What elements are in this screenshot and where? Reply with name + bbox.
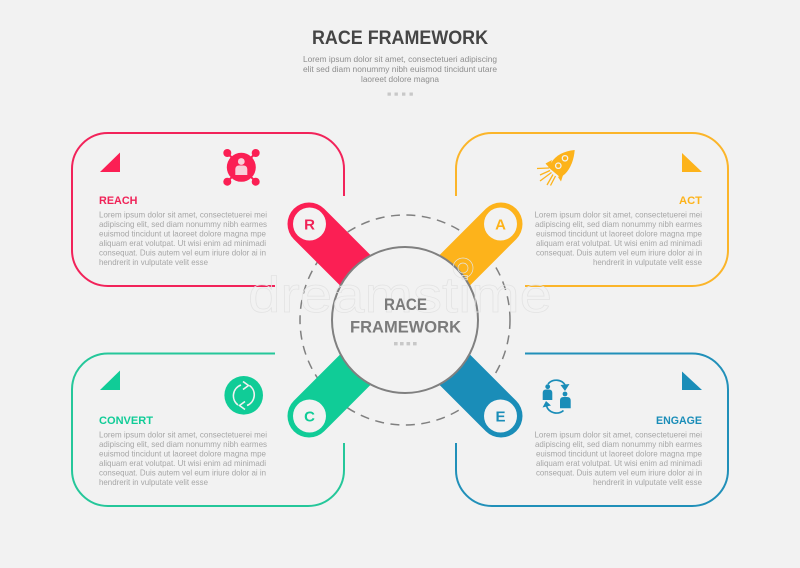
reach body text <box>99 210 267 267</box>
central diagram <box>248 208 552 432</box>
icon: convert cycle <box>224 376 263 415</box>
reach body text: euismod tincidunt ut laoreet dolore magna mpe <box>99 228 266 238</box>
pill: A <box>405 208 517 320</box>
pill: E <box>405 320 517 432</box>
panel: reach <box>72 133 344 286</box>
act body text: hendrerit in vulputate velit esse <box>593 257 702 267</box>
engage body text: aliquam erat volutpat. Ut wisi enim ad minimadi <box>536 458 702 468</box>
act body text: aliquam erat volutpat. Ut wisi enim ad minimadi <box>536 238 702 248</box>
act corner triangle <box>682 153 702 172</box>
center label: RACE <box>384 296 427 314</box>
act body text: consequat. Duis autem vel eum iriure dolor ai in <box>536 248 702 258</box>
panel: act <box>456 133 728 286</box>
center label: FRAMEWORK <box>350 318 461 336</box>
header dots <box>388 92 413 96</box>
center dots <box>394 342 417 345</box>
pill: A: A <box>495 216 506 234</box>
reach body text: consequat. Duis autem vel eum iriure dolor ai in <box>99 248 266 258</box>
convert body text <box>99 430 267 487</box>
convert outline <box>72 354 344 506</box>
reach outline <box>72 133 344 286</box>
convert body text: adipiscing elit, sed diam nonummy nibh earmes <box>99 439 267 449</box>
engage heading: ENGAGE <box>656 415 702 427</box>
subtitle text: Lorem ipsum dolor sit amet, consectetueri adipiscing <box>303 54 497 64</box>
engage body text: Lorem ipsum dolor sit amet, consectetuerei mei <box>534 430 702 440</box>
subtitle text <box>303 54 497 84</box>
panel: engage <box>456 354 728 506</box>
engage body text: euismod tincidunt ut laoreet dolore magna mpe <box>536 448 702 458</box>
reach body text: adipiscing elit, sed diam nonummy nibh earmes <box>99 219 267 229</box>
engage body text: hendrerit in vulputate velit esse <box>593 477 702 487</box>
convert heading: CONVERT <box>99 415 153 427</box>
icon: rocket <box>537 150 575 186</box>
panel: convert <box>72 354 344 506</box>
center label <box>350 296 461 336</box>
reach heading: REACH <box>99 195 138 207</box>
convert body text: Lorem ipsum dolor sit amet, consectetuerei mei <box>99 430 267 440</box>
reach corner triangle <box>100 152 120 172</box>
pill: E: E <box>495 408 506 426</box>
convert body text: hendrerit in vulputate velit esse <box>99 477 208 487</box>
engage body text <box>534 430 702 487</box>
pill: R <box>293 208 405 320</box>
engage outline <box>456 354 728 506</box>
act body text: euismod tincidunt ut laoreet dolore magna mpe <box>536 228 702 238</box>
icon: reach audience <box>223 149 260 186</box>
pill: R: R <box>304 216 315 234</box>
engage body text: adipiscing elit, sed diam nonummy nibh earmes <box>535 439 702 449</box>
convert body text: aliquam erat volutpat. Ut wisi enim ad minimadi <box>99 458 266 468</box>
act heading: ACT <box>679 195 702 207</box>
title: RACE FRAMEWORK <box>312 27 488 49</box>
subtitle text: elit sed diam nonummy nibh euismod tincidunt utare <box>303 64 497 74</box>
act body text <box>534 210 702 267</box>
reach body text: hendrerit in vulputate velit esse <box>99 257 208 267</box>
reach body text: Lorem ipsum dolor sit amet, consectetuerei mei <box>99 210 267 220</box>
convert body text: consequat. Duis autem vel eum iriure dolor ai in <box>99 468 266 478</box>
icon: engage people exchange <box>542 380 571 413</box>
pill: C: C <box>304 408 315 426</box>
act outline <box>456 133 728 286</box>
engage corner triangle <box>682 372 702 390</box>
header block <box>303 27 497 96</box>
dashed orbit ring <box>300 215 510 425</box>
reach body text: aliquam erat volutpat. Ut wisi enim ad minimadi <box>99 238 266 248</box>
convert corner triangle <box>100 370 120 390</box>
convert body text: euismod tincidunt ut laoreet dolore magna mpe <box>99 448 266 458</box>
act body text: Lorem ipsum dolor sit amet, consectetuerei mei <box>534 210 702 220</box>
engage body text: consequat. Duis autem vel eum iriure dolor ai in <box>536 468 702 478</box>
center circle <box>332 247 478 393</box>
subtitle text: laoreet dolore magna <box>361 74 439 84</box>
act body text: adipiscing elit, sed diam nonummy nibh earmes <box>535 219 702 229</box>
pill: C <box>293 320 405 432</box>
central diagram: dreamstime <box>248 267 552 323</box>
